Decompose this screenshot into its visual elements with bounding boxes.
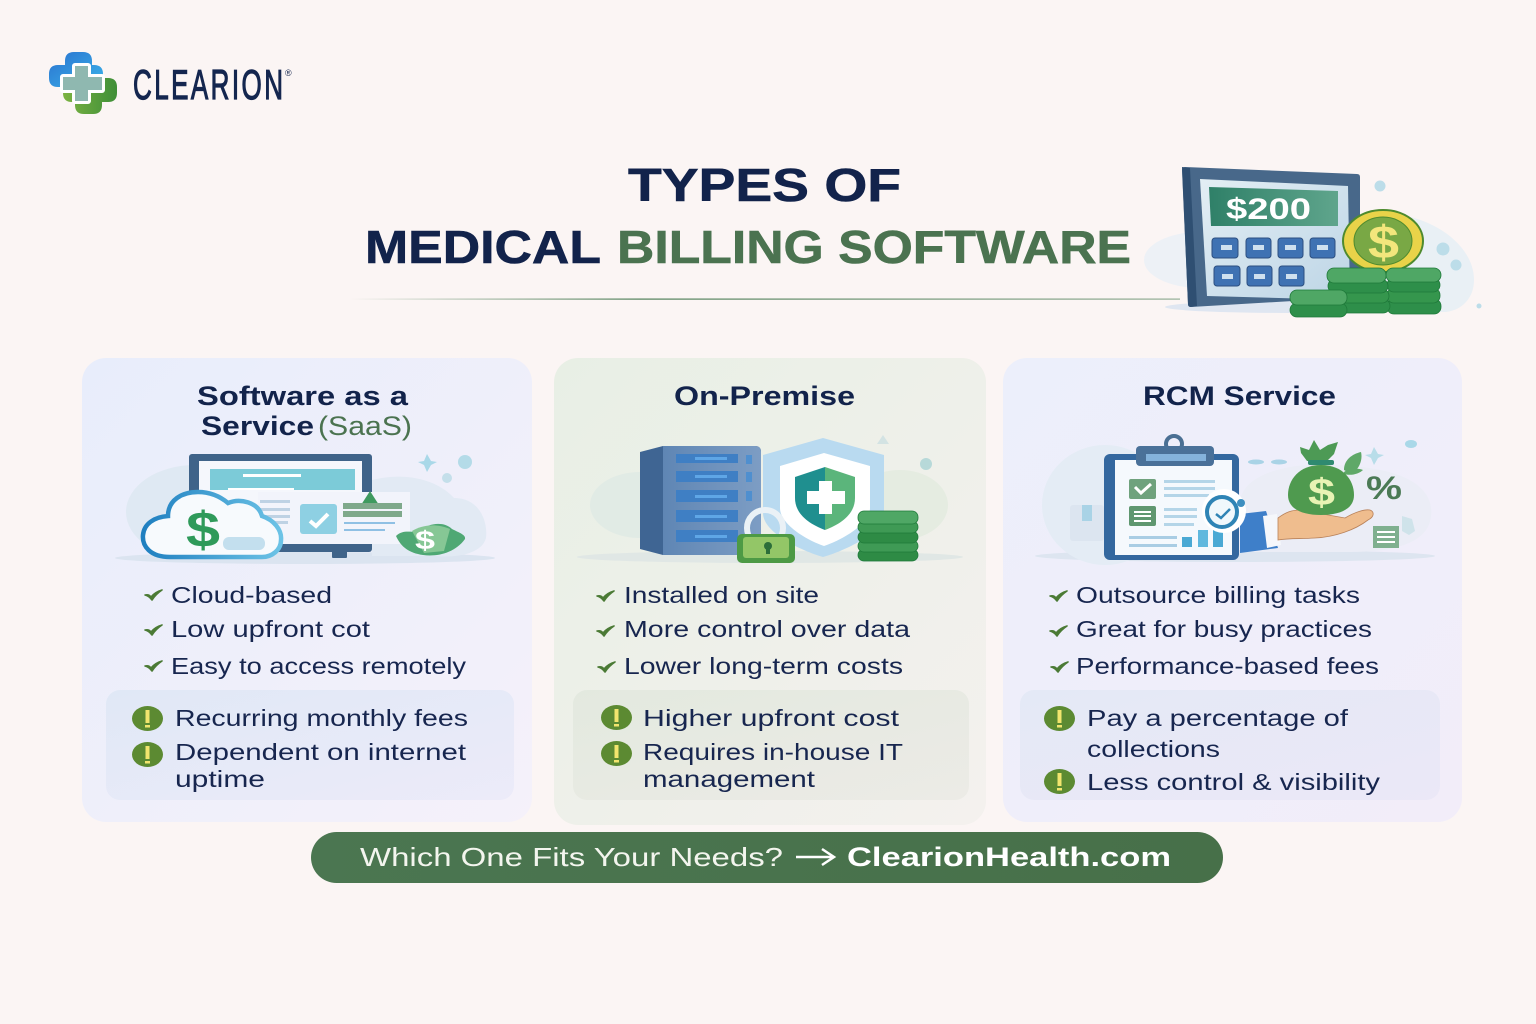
panel: RCM Service	[1003, 358, 1462, 822]
heading: RCM Service: RCM Service	[1143, 381, 1336, 411]
call to action bar	[311, 832, 1223, 883]
heading: On-Premise: On-Premise	[674, 381, 855, 411]
arrow	[796, 849, 834, 865]
heading: SaaS: Software as a	[197, 381, 409, 411]
icon: warning	[601, 705, 632, 730]
illustration: clipboard and money bag: %	[1366, 470, 1402, 506]
benefit: Lower long-term costs	[624, 653, 903, 679]
icon: warning	[1044, 706, 1075, 731]
registered mark: ®	[285, 68, 292, 78]
drawback: Requires in-house IT	[643, 739, 903, 765]
icon: warning	[132, 706, 163, 731]
benefits list	[1050, 582, 1379, 679]
icon: check	[145, 661, 162, 671]
icon: calculator with coins: $	[1368, 216, 1399, 268]
drawbacks panel	[573, 690, 969, 800]
icon: check	[597, 626, 614, 636]
benefit: Low upfront cot	[171, 616, 371, 642]
illustration: cloud and monitor: $	[186, 502, 220, 558]
benefit: Cloud-based	[171, 582, 332, 608]
brand name: CLEARION	[133, 62, 283, 109]
icon: check	[1050, 591, 1067, 601]
illustration: server, shield, lock and coins	[577, 435, 963, 563]
icon: calculator with coins: $200	[1226, 193, 1311, 226]
icon: check	[145, 590, 162, 600]
icon: check	[597, 591, 614, 601]
card background	[82, 358, 532, 822]
icon: check	[1050, 626, 1067, 636]
benefit: Easy to access remotely	[171, 653, 467, 679]
benefit: Great for busy practices	[1076, 616, 1372, 642]
logo: Clearion	[49, 52, 292, 114]
panel: Software as a Service	[82, 358, 532, 822]
question text: Which One Fits Your Needs?	[360, 842, 783, 872]
benefit: Outsource billing tasks	[1076, 582, 1360, 608]
card background	[1003, 358, 1462, 822]
drawback continuation: uptime	[175, 766, 265, 792]
benefit: Performance-based fees	[1076, 653, 1379, 679]
icon: check	[598, 662, 615, 672]
illustration: clipboard and money bag	[1035, 436, 1435, 565]
illustration: clipboard and money bag: $	[1308, 472, 1335, 514]
card background	[554, 358, 986, 825]
illustration: cloud and monitor	[115, 454, 495, 564]
drawback: Pay a percentage of	[1087, 705, 1349, 731]
drawback continuation: management	[643, 766, 816, 792]
icon: calculator with coins	[1144, 167, 1482, 317]
website: ClearionHealth.com	[847, 842, 1171, 872]
benefit: Installed on site	[624, 582, 819, 608]
drawback: Less control & visibility	[1087, 769, 1381, 795]
drawbacks panel	[1020, 690, 1440, 800]
title	[365, 159, 1131, 273]
benefit: More control over data	[624, 616, 910, 642]
benefits list	[597, 582, 910, 679]
drawbacks panel	[106, 690, 514, 800]
heading: SaaS: Service	[201, 411, 314, 441]
icon: medical cross logo	[49, 52, 117, 114]
drawback: Dependent on internet	[175, 739, 467, 765]
title line 1: TYPES OF	[628, 159, 901, 211]
drawback: Higher upfront cost	[643, 705, 900, 731]
icon: warning	[601, 741, 632, 766]
heading: SaaS	[197, 381, 412, 441]
title line 2: MEDICAL	[365, 221, 601, 273]
illustration: cloud and monitor: $	[415, 525, 436, 555]
heading: SaaS: (SaaS)	[318, 411, 412, 441]
panel: On-Premise	[554, 358, 986, 825]
drawback continuation: collections	[1087, 736, 1220, 762]
icon: warning	[132, 742, 163, 767]
icon: warning	[1044, 769, 1075, 794]
icon: check	[145, 625, 162, 635]
drawback: Recurring monthly fees	[175, 705, 468, 731]
title line 2 accent: BILLING SOFTWARE	[617, 221, 1131, 273]
benefits list	[145, 582, 467, 679]
icon: check	[1051, 662, 1068, 672]
